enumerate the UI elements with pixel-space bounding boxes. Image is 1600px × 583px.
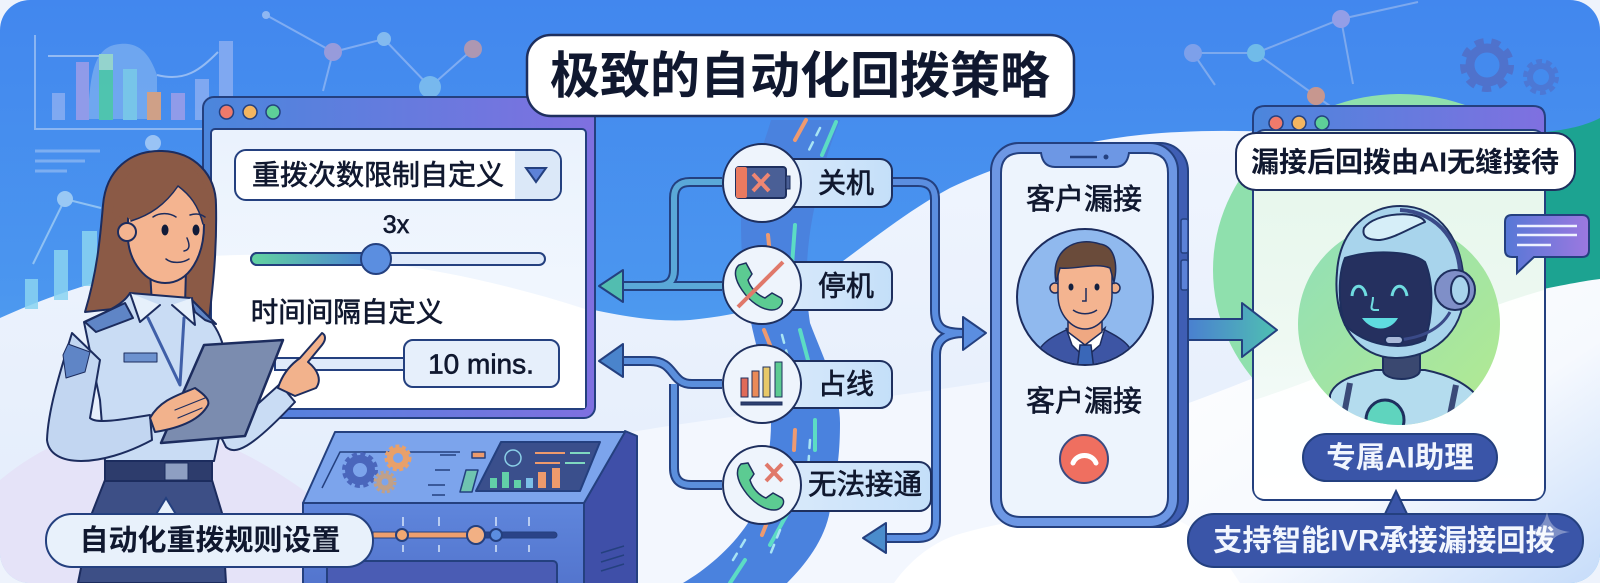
network decoration top centre [262,11,482,98]
icon: dead battery [736,167,790,198]
belt [105,461,212,481]
panel: control machine [303,431,637,583]
icon: gears top right [1463,41,1557,93]
input: 10 mins: 10 mins. [428,348,534,380]
neck [150,270,186,305]
chart decoration top left [35,35,233,129]
shirt torso [84,293,228,461]
left arm [47,333,152,461]
panel: customer phone: 客户漏接 [1026,183,1142,216]
label: seamless AI handoff [1236,133,1575,190]
name tag [124,353,157,362]
panel: customer phone: 客户漏接 [1026,385,1142,418]
machine slider [373,517,557,552]
holding hand [150,388,208,432]
label: IVR support [1188,491,1583,567]
label: dedicated AI assistant [1303,434,1497,481]
machine switches [428,452,485,495]
window buttons [220,105,280,119]
slider: 3x: 3x [383,211,410,239]
label: dedicated AI assistant: 专属AI助理 [1326,442,1474,474]
icon: sparkle [1524,512,1570,552]
title: 极致的自动化回拨策略 [550,48,1050,104]
right forearm [215,384,295,450]
icon: signal bars [741,362,782,405]
avatar: customer [1017,229,1153,370]
title [527,35,1074,116]
arrow: lower feedback to settings [599,344,722,485]
road [683,120,840,583]
headset [1400,210,1460,280]
status: busy line [723,345,892,423]
green disc [1298,223,1500,425]
face [128,178,204,283]
network decoration top right [1184,2,1418,106]
status: busy line: 占线 [818,368,874,400]
shoulder straps [85,298,216,332]
icon: chat bubble [1505,215,1589,273]
slider: 3x [251,211,545,274]
panel: retry settings window [203,97,595,418]
status: out of service [723,246,892,324]
hair back [85,151,216,320]
input: 10 mins [275,340,559,387]
status: unreachable [723,446,931,524]
status: unreachable: 无法接通 [808,469,922,501]
panel: AI assistant window [1253,106,1545,500]
icon: phone struck through [735,262,783,310]
label: IVR support: 支持智能IVR承接漏接回拨 [1213,524,1555,558]
arrow: upper feedback to settings [599,182,722,302]
arm badge [63,344,90,378]
chart decoration lower left [25,135,161,309]
pants [78,480,226,583]
status: power off: 关机 [818,168,874,198]
label: automatic retry rule settings: 自动化重拨规则设置 [79,524,341,557]
arrow: outcomes to customer phone [863,182,986,553]
machine screen [476,442,600,491]
dropdown: retry count [235,150,561,200]
label: time interval: 时间间隔自定义 [251,296,443,328]
arrow: phone to AI window [1188,303,1277,357]
figure: AI robot [1329,354,1474,425]
icon: machine gears [344,446,410,492]
icon: red hang-up button [1060,435,1108,483]
hair front [112,158,210,224]
icon: phone with x [737,463,784,510]
figure: operator woman [47,151,325,583]
panel: customer phone [991,143,1188,527]
pointing hand [278,333,325,396]
tablet [161,340,283,443]
status: out of service: 停机 [818,270,874,302]
collar and lanyard [130,293,195,325]
label: seamless AI handoff: 漏接后回拨由AI无缝接待 [1251,146,1559,178]
status: power off [723,144,892,222]
window buttons [1269,116,1329,130]
machine vent [601,546,624,571]
facial features [162,224,200,236]
label: automatic retry rule settings [46,498,373,567]
dropdown: retry count: 重拨次数限制自定义 [252,160,504,190]
